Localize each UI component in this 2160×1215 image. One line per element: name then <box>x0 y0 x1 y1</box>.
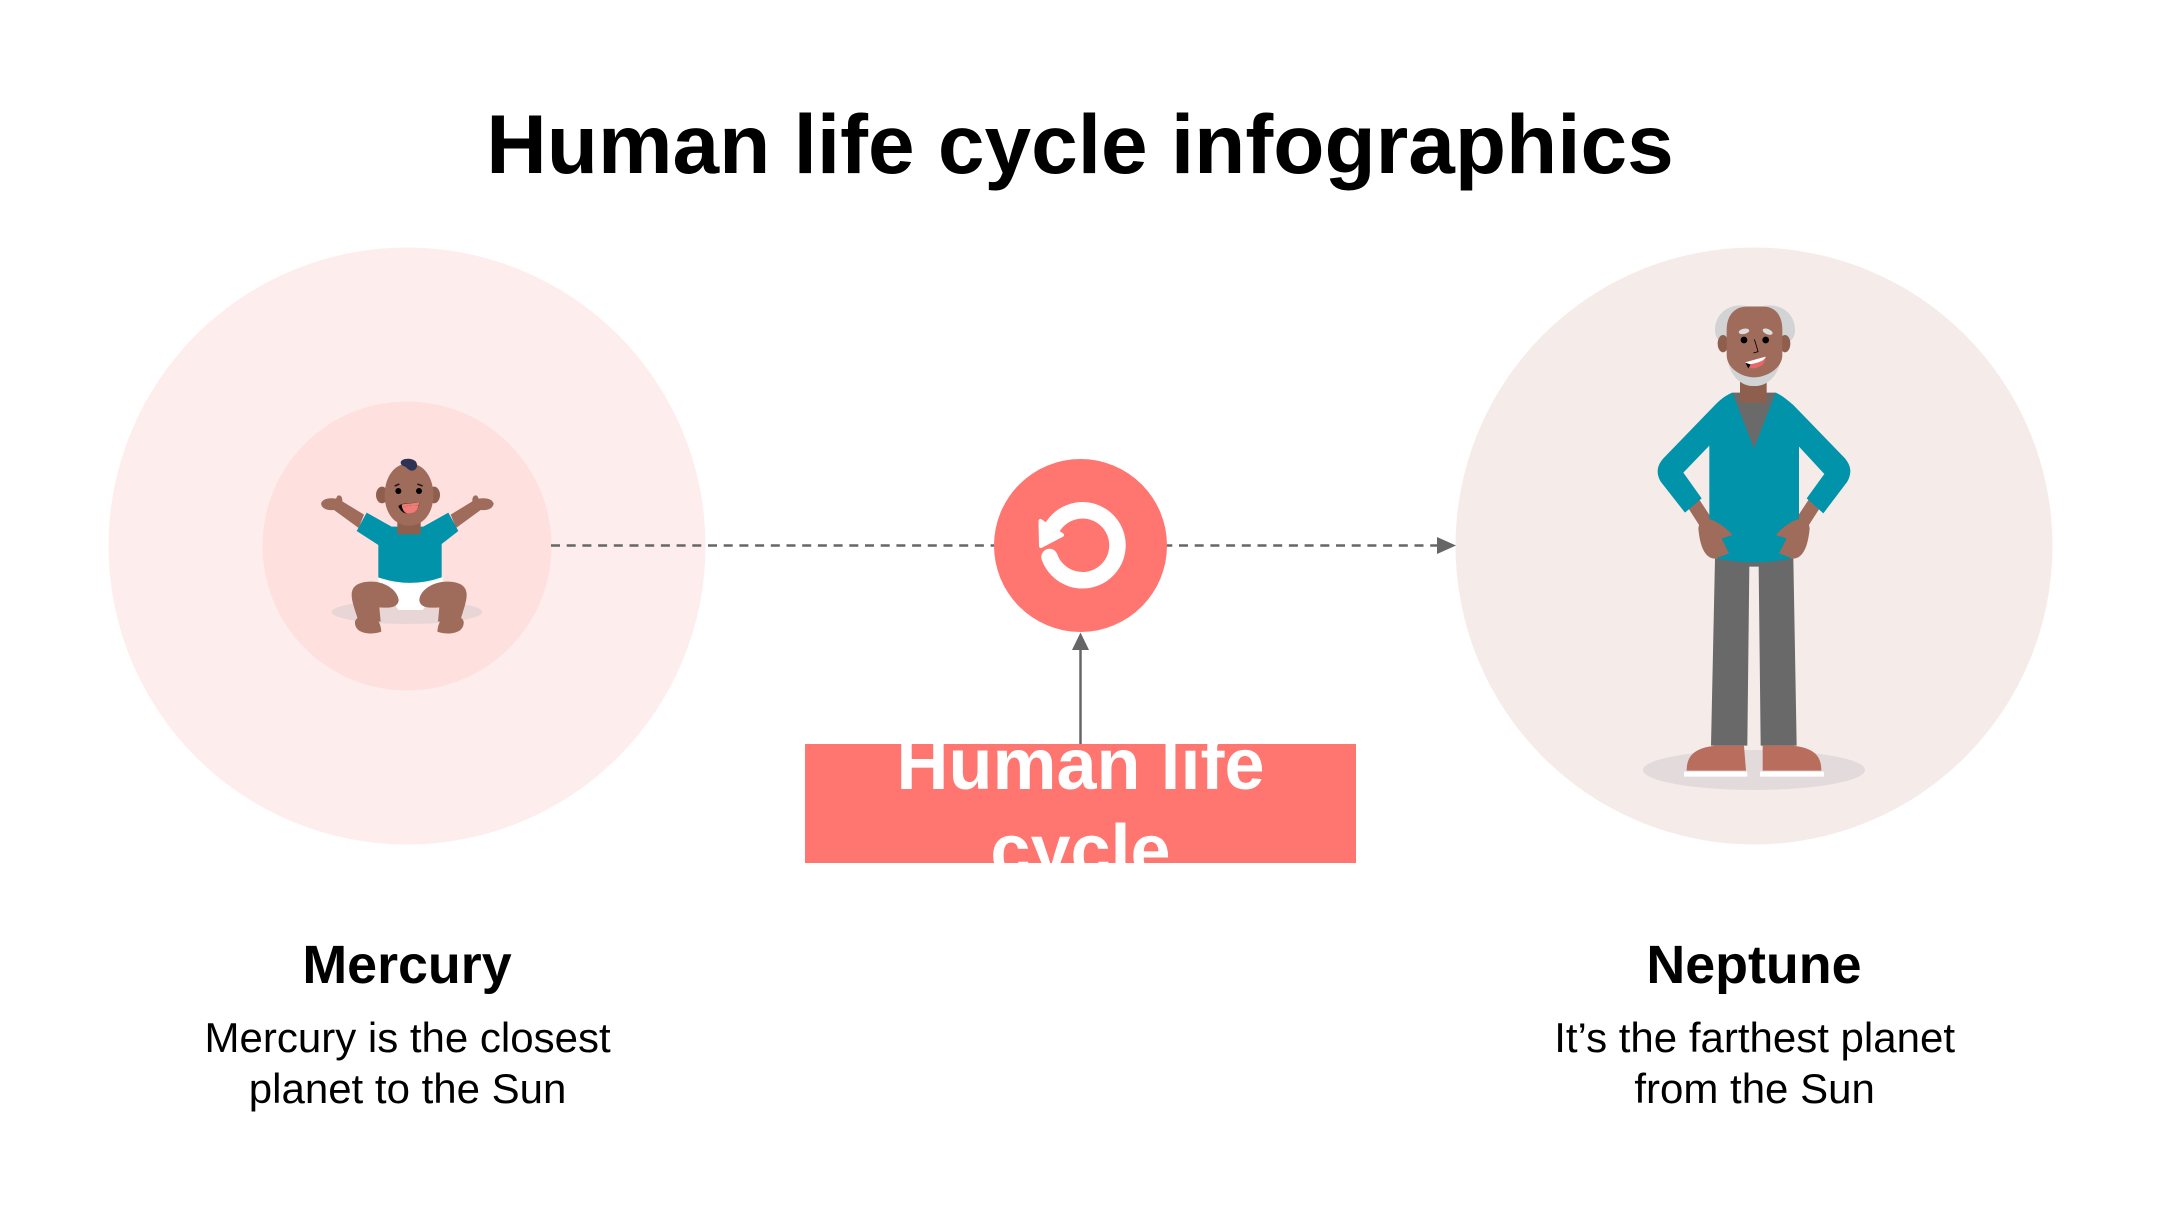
panel: baby circles <box>108 248 706 844</box>
heading: Neptune: Neptune <box>1646 935 1862 995</box>
heading: Mercury: Mercury <box>302 935 512 995</box>
text block: Mercury <box>205 935 611 1112</box>
box: Human life cycle <box>805 744 1356 863</box>
description: Mercury: Mercury is the closest <box>205 1014 611 1061</box>
title: Human life cycle infographics <box>486 97 1674 191</box>
icon: elderly man illustration <box>1643 305 1865 790</box>
description: Mercury: planet to the Sun <box>249 1065 566 1112</box>
panel: elder circle <box>1456 248 2052 844</box>
description: Neptune: It’s the farthest planet <box>1554 1014 1955 1061</box>
icon: baby illustration <box>321 459 494 634</box>
arrow: box to circle <box>1072 632 1089 744</box>
description: Mercury <box>205 1014 611 1112</box>
icon: coral cycle circle <box>994 459 1167 632</box>
description: Neptune <box>1554 1014 1955 1112</box>
arrow: dashed timeline <box>551 537 1456 554</box>
description: Neptune: from the Sun <box>1634 1065 1875 1112</box>
text block: Neptune <box>1554 935 1955 1112</box>
